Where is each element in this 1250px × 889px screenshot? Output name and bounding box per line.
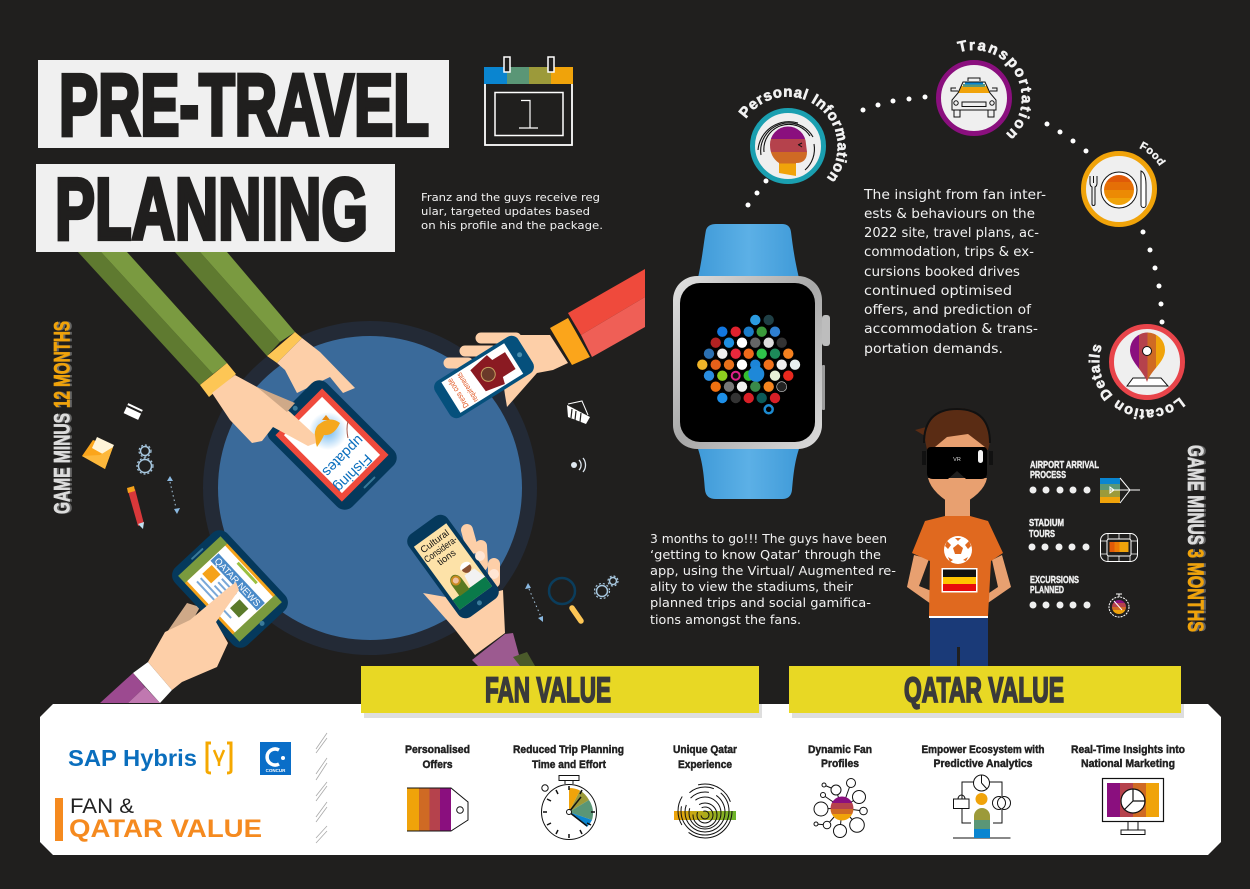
- label: unique qatar experience: [673, 744, 738, 771]
- panel: value footer: [40, 704, 1221, 855]
- icon: monitor chart: [1102, 778, 1164, 834]
- label: personalised offers: [405, 744, 470, 771]
- label: empower ecosystem: Empower Ecosystem with: [922, 744, 1045, 756]
- label: personalised offers: Offers: [422, 759, 452, 771]
- heading: fan and qatar value: [55, 795, 262, 843]
- phone: fishing updates tablet: updates: [319, 432, 367, 480]
- label: empower ecosystem: Predictive Analytics: [934, 758, 1032, 770]
- arm: green sleeve right: [175, 252, 355, 393]
- icon: pencil: [127, 486, 144, 529]
- side label: game minus 12 months: [50, 321, 76, 514]
- phone body: Dress code: [445, 376, 471, 410]
- item: excursions planned: EXCURSIONS: [1030, 575, 1079, 586]
- icon: profile network: [814, 778, 867, 838]
- logo: sap hybris: SAP Hybris: [68, 745, 197, 771]
- icon: gears right: [594, 576, 618, 598]
- side label: game minus 3 months: 3 MONTHS: [1185, 549, 1210, 632]
- icon: envelope: [82, 437, 114, 469]
- text: fan insight: cursions booked drives: [864, 265, 1020, 280]
- hatch divider: [316, 733, 327, 843]
- icon: basket: [567, 401, 590, 424]
- icon: dotted arrow left: [167, 476, 180, 514]
- banner: fan value: [361, 666, 762, 718]
- item: stadium tours: [1028, 518, 1138, 562]
- text: fan insight: commodation, trips & ex-: [864, 245, 1034, 260]
- node: food: Food: [1139, 141, 1166, 166]
- text: three months to go: tions amongst the fans.: [650, 612, 801, 627]
- icon: predictive analytics: [953, 775, 1010, 838]
- phone: dress code with hand and red sleeve: [431, 269, 645, 421]
- item: stadium tours: STADIUM: [1029, 518, 1064, 529]
- item: stadium tours: TOURS: [1029, 529, 1055, 540]
- tablet text: Fishing: [330, 450, 375, 495]
- item: excursions planned: [1030, 575, 1129, 617]
- label: unique qatar experience: Unique Qatar: [673, 744, 738, 756]
- text: fan insight: 2022 site, travel plans, ac-: [864, 226, 1039, 241]
- phone: fishing updates tablet: [263, 376, 401, 514]
- label: unique qatar experience: Experience: [678, 759, 732, 771]
- heading: fan and qatar value: FAN &: [70, 795, 134, 818]
- character: fan with vr headset: VR: [953, 457, 961, 463]
- phone body: [431, 333, 537, 421]
- logo: concur: CONCUR: [266, 768, 286, 773]
- title: pre-travel: PRE-TRAVEL: [59, 57, 429, 154]
- phone: qatar news tablet with hand: QATAR NEWS: [212, 556, 262, 609]
- icon: calendar: [484, 57, 573, 145]
- item: airport arrival process: AIRPORT ARRIVAL: [1030, 460, 1099, 471]
- text: three months to go: ality to view the stadiums, their: [650, 579, 854, 594]
- text: fan insight: The insight from fan inter-: [863, 188, 1046, 203]
- node: personal information: Personal Information: [738, 88, 848, 182]
- phone: cultural considerations with hand: [404, 511, 535, 666]
- side label: game minus 3 months: GAME MINUS: [1183, 445, 1208, 545]
- text: fan insight: ests & behaviours on the: [864, 207, 1035, 222]
- text: franz intro: Franz and the guys receive reg: [421, 191, 600, 204]
- logo: sap hybris: [68, 743, 231, 773]
- text: fan insight: accommodation & trans-: [864, 322, 1038, 337]
- logo: concur: [260, 742, 291, 775]
- text: three months to go: app, using the Virtual/ Augmented re-: [650, 563, 896, 578]
- text: three months to go: 3 months to go!!! The guys have been: [650, 531, 887, 546]
- label: dynamic fan profiles: Profiles: [821, 758, 859, 770]
- item: airport arrival process: [1030, 460, 1140, 503]
- label: reduced trip planning: [513, 744, 624, 771]
- side label: game minus 12 months: GAME MINUS: [52, 413, 76, 514]
- label: reduced trip planning: Time and Effort: [532, 759, 606, 771]
- app icon cluster: [697, 315, 800, 413]
- icon: wifi signal: [571, 458, 586, 472]
- node: location details: Location Details: [1088, 344, 1186, 420]
- character: fan with vr headset: [907, 408, 1011, 666]
- label: real-time insights: Real-Time Insights into: [1071, 744, 1185, 756]
- label: personalised offers: Personalised: [405, 744, 470, 756]
- item: airport arrival process: PROCESS: [1030, 470, 1066, 481]
- side label: game minus 3 months: GAME MINUS: [1185, 445, 1210, 545]
- text: franz intro: ular, targeted updates based: [421, 205, 590, 218]
- icon: card: [124, 403, 143, 420]
- table circle: [203, 321, 537, 655]
- text: fan insight: continued optimised: [864, 284, 1012, 299]
- route dots: [746, 94, 1164, 324]
- icon: gears left: [137, 445, 153, 474]
- fish illustration: [309, 412, 348, 450]
- phone: cultural considerations with hand: Cultural: [419, 528, 452, 556]
- label: dynamic fan profiles: [808, 744, 872, 770]
- arm: green sleeve left with pointing hand: [78, 252, 316, 446]
- text: three months to go: [650, 531, 896, 627]
- label: reduced trip planning: Reduced Trip Planning: [513, 744, 624, 756]
- banner: qatar value: QATAR VALUE: [904, 671, 1064, 710]
- text: fan insight: portation demands.: [864, 342, 1003, 357]
- icon: magnifier: [549, 578, 581, 621]
- icon: fingerprint: [674, 784, 736, 838]
- phone: cultural considerations with hand: Considera-: [422, 534, 460, 566]
- label: real-time insights: National Marketing: [1081, 758, 1175, 770]
- banner: qatar value: [789, 666, 1184, 718]
- label: dynamic fan profiles: Dynamic Fan: [808, 744, 872, 756]
- label: empower ecosystem: [922, 744, 1045, 770]
- phone: qatar news tablet with hand: [100, 526, 292, 703]
- text: fan insight: offers, and prediction of: [864, 303, 1031, 318]
- icon: dotted arrow right: [525, 583, 543, 622]
- phone body: requirements: [455, 371, 480, 404]
- title: pre-travel: [38, 57, 449, 154]
- text: fan insight: [863, 188, 1046, 357]
- side label: game minus 12 months: GAME MINUS: [50, 413, 74, 514]
- node: transportation: Transportation: [956, 40, 1032, 138]
- side label: game minus 12 months: 12 MONTHS: [50, 321, 74, 408]
- smart watch: [673, 224, 830, 499]
- phone: cultural considerations with hand: tions: [435, 548, 458, 568]
- side label: game minus 3 months: 3 MONTHS: [1183, 549, 1208, 632]
- label: real-time insights: [1071, 744, 1185, 770]
- icon: price tag: [407, 788, 468, 831]
- text: three months to go: ‘getting to know Qatar’ through the: [650, 547, 881, 562]
- text: franz intro: on his profile and the package.: [421, 219, 603, 232]
- side label: game minus 12 months: 12 MONTHS: [52, 321, 76, 408]
- icon: stopwatch: [542, 776, 596, 840]
- item: excursions planned: PLANNED: [1030, 585, 1064, 596]
- title: planning: PLANNING: [55, 161, 368, 258]
- node: food: [1081, 141, 1166, 227]
- heading: fan and qatar value: QATAR VALUE: [69, 815, 262, 843]
- text: three months to go: planned trips and social gamifica-: [650, 595, 871, 610]
- text: franz intro: [421, 191, 603, 232]
- banner: fan value: FAN VALUE: [485, 671, 611, 710]
